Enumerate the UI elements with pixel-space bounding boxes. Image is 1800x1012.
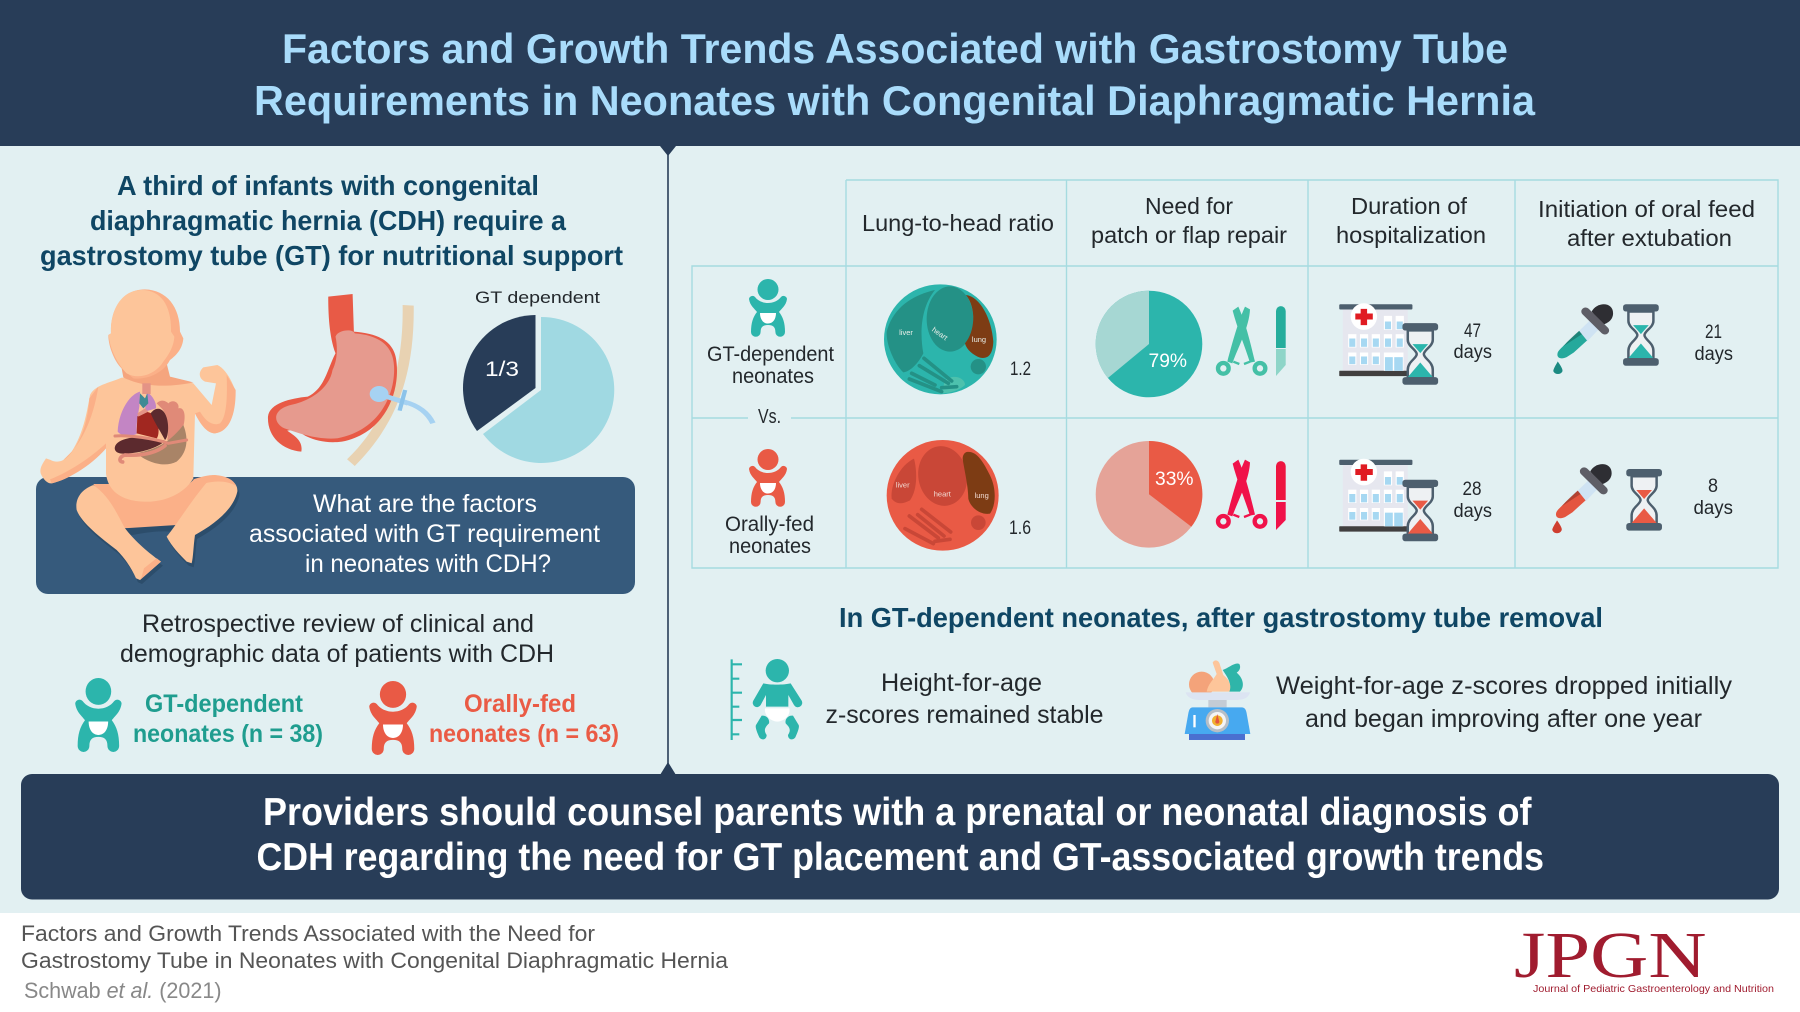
- icon: red scissors and scalpel: [1218, 460, 1286, 530]
- value: 47 days: days: [1454, 342, 1492, 363]
- illustration: baby with herniated organs: [40, 289, 239, 584]
- table column headers: [862, 193, 1755, 251]
- value: 21 days: 21: [1705, 322, 1722, 343]
- icon: teal scissors and scalpel: [1218, 306, 1286, 376]
- header band with title: [0, 0, 1800, 156]
- GT-dependent cohort label: GT-dependent: [145, 690, 304, 718]
- left panel heading: [40, 170, 623, 271]
- question text: associated with GT requirement: [249, 520, 600, 548]
- value: 21 days: days: [1694, 344, 1733, 365]
- study description text: Retrospective review of clinical and: [142, 610, 534, 638]
- vertical divider: [667, 150, 669, 770]
- value: 28 days: [1454, 479, 1492, 522]
- pie chart: GT dependent one third: [463, 288, 614, 463]
- table row label: GT-dependent neonates: GT-dependent: [707, 343, 834, 366]
- icon: GT-dependent baby: [75, 678, 122, 752]
- value: 47 days: 47: [1464, 321, 1481, 342]
- study description text: [120, 610, 554, 668]
- icon: dropper and hourglass, GT-dependent: [1553, 304, 1659, 374]
- question text: What are the factors: [313, 490, 537, 518]
- table column headers: Duration of: [1351, 193, 1468, 219]
- organs: [115, 383, 187, 464]
- table column headers: Initiation of oral feed: [1538, 196, 1755, 222]
- table column headers: hospitalization: [1336, 222, 1486, 248]
- weight-for-age text: and began improving after one year: [1305, 705, 1702, 733]
- value: 8 days: 8: [1708, 476, 1718, 497]
- Vs. label: Vs.: [758, 406, 781, 428]
- orally-fed cohort label: neonates (n = 63): [429, 720, 619, 748]
- pie chart: 33% patch or flap repair: [1096, 441, 1202, 548]
- conclusion banner: [21, 762, 1779, 900]
- citation: [21, 921, 729, 1003]
- illustration: stomach with gastrostomy tube: [268, 294, 433, 466]
- question text: in neonates with CDH?: [305, 550, 551, 578]
- table row label: GT-dependent neonates: [707, 279, 834, 388]
- value: 8 days: days: [1694, 498, 1733, 519]
- value: 28 days: days: [1454, 501, 1492, 522]
- weight-for-age text: [1276, 672, 1733, 733]
- journal logo: Journal of Pediatric Gastroenterology and Nutrition: [1533, 983, 1774, 995]
- lung-to-head ultrasound: orally-fed: heart: [934, 490, 952, 498]
- icon: hospital and hourglass, GT-dependent: [1339, 303, 1438, 385]
- value: 1.6: 1.6: [1009, 518, 1031, 539]
- conclusion text: CDH regarding the need for GT placement and GT-associated growth trends: [256, 836, 1544, 879]
- comparison table grid: [692, 180, 1778, 568]
- footer background: [0, 913, 1800, 1012]
- left panel heading: diaphragmatic hernia (CDH) require a: [90, 205, 566, 236]
- orally-fed cohort label: [429, 690, 619, 748]
- citation: Gastrostomy Tube in Neonates with Congenital Diaphragmatic Hernia: [21, 948, 729, 973]
- table row label: orally-fed neonates: neonates: [729, 535, 811, 558]
- icon: dropper and hourglass, orally-fed: [1552, 464, 1662, 533]
- table column headers: patch or flap repair: [1091, 222, 1287, 248]
- icon: weighing scale with food: [1185, 660, 1250, 740]
- table column headers: after extubation: [1567, 225, 1732, 251]
- pie label: GT dependent: [475, 288, 600, 307]
- table column headers: Lung-to-head ratio: [862, 210, 1054, 236]
- GT-dependent cohort label: [133, 690, 323, 748]
- question text: [249, 490, 600, 578]
- table row label: GT-dependent neonates: neonates: [732, 365, 814, 388]
- table row label: orally-fed neonates: Orally-fed: [725, 513, 814, 536]
- height-for-age text: [826, 669, 1104, 729]
- lung-to-head ultrasound: GT-dependent: [884, 284, 997, 394]
- height-for-age text: z-scores remained stable: [826, 701, 1104, 729]
- weight-for-age text: Weight-for-age z-scores dropped initially: [1276, 672, 1733, 700]
- orally-fed cohort label: Orally-fed: [464, 690, 576, 718]
- pie chart: 79% patch or flap repair: 79%: [1148, 351, 1187, 372]
- lung-to-head ultrasound: orally-fed: liver: [896, 480, 910, 490]
- value: 47 days: [1454, 321, 1492, 363]
- journal logo: JPGN: [1514, 919, 1706, 992]
- icon: hospital and hourglass, orally-fed: [1339, 459, 1438, 541]
- lung-to-head ultrasound: GT-dependent: heart: [930, 325, 950, 343]
- pie chart: GT dependent one third: 1/3: [485, 358, 519, 381]
- pie chart: 33% patch or flap repair: 33%: [1155, 469, 1194, 490]
- value: 28 days: 28: [1462, 479, 1482, 500]
- title line 1: Factors and Growth Trends Associated with Gastrostomy Tube: [282, 25, 1508, 72]
- lung-to-head ultrasound: GT-dependent: lung: [972, 335, 986, 344]
- value: 21 days: [1694, 322, 1733, 365]
- section heading: after tube removal: In GT-dependent neonates, after gastrostomy tube removal: [839, 602, 1603, 633]
- left panel heading: A third of infants with congenital: [117, 170, 539, 201]
- lung-to-head ultrasound: orally-fed: lung: [975, 491, 989, 500]
- table row label: orally-fed neonates: [725, 449, 814, 558]
- conclusion text: Providers should counsel parents with a prenatal or neonatal diagnosis of: [263, 791, 1532, 834]
- icon: baby with height ruler: [732, 659, 802, 740]
- title line 2: Requirements in Neonates with Congenital Diaphragmatic Hernia: [254, 77, 1536, 124]
- journal logo: [1514, 919, 1774, 995]
- GT-dependent cohort label: neonates (n = 38): [133, 720, 323, 748]
- height-for-age text: Height-for-age: [881, 669, 1042, 697]
- value: 1.2: 1.2: [1010, 359, 1031, 380]
- question panel: [36, 477, 635, 594]
- table column headers: Need for: [1145, 193, 1233, 219]
- citation: Schwab et al. (2021): [24, 978, 222, 1003]
- lung-to-head ultrasound: GT-dependent: liver: [899, 328, 913, 337]
- value: 8 days: [1694, 476, 1733, 519]
- left panel heading: gastrostomy tube (GT) for nutritional support: [40, 240, 623, 271]
- citation: Factors and Growth Trends Associated with the Need for: [21, 921, 595, 946]
- icon: orally-fed baby: [369, 681, 417, 755]
- study description text: demographic data of patients with CDH: [120, 640, 554, 668]
- conclusion text: [256, 791, 1544, 879]
- lung-to-head ultrasound: orally-fed: [887, 440, 999, 551]
- pie chart: 79% patch or flap repair: [1096, 291, 1202, 397]
